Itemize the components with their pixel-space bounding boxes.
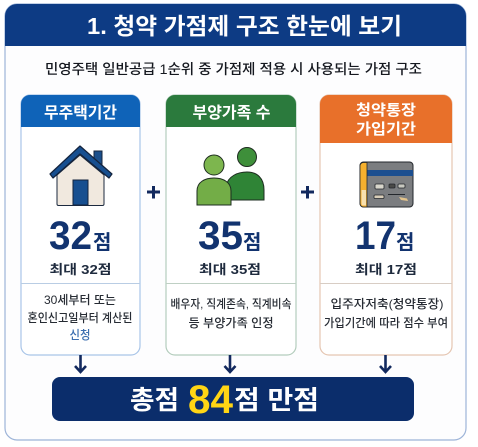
card heading	[356, 102, 416, 138]
arrow 1	[75, 355, 86, 372]
description: 30세부터 또는	[44, 293, 116, 307]
title banner	[5, 4, 466, 46]
total text: 84	[188, 378, 234, 422]
card heading: 무주택기간	[44, 104, 117, 122]
description	[324, 297, 448, 330]
panel: 청약통장 가입기간	[320, 95, 452, 355]
icon: people	[197, 148, 264, 205]
title: 1. 청약 가점제 구조 한눈에 보기	[87, 13, 402, 39]
icon: bankbook	[360, 162, 413, 207]
panel: 무주택기간	[21, 95, 140, 355]
max score: 최대 35점	[199, 262, 261, 277]
score: 32	[49, 214, 92, 258]
plus sign 1	[147, 186, 160, 198]
description: 가입기간에 따라 점수 부여	[324, 316, 448, 330]
description: 혼인신고일부터 계산된	[28, 311, 132, 325]
description: 신청	[70, 328, 90, 342]
description	[170, 297, 292, 330]
plus sign 2	[301, 186, 314, 198]
description: 입주자저축(청약통장)	[330, 297, 444, 311]
subtitle: 민영주택 일반공급 1순위 중 가점제 적용 시 사용되는 가점 구조	[45, 61, 422, 77]
arrow 2	[224, 355, 236, 372]
score: 점	[243, 231, 261, 254]
score: 점	[93, 231, 111, 254]
card heading: 부양가족 수	[192, 104, 271, 122]
max score: 최대 17점	[355, 262, 417, 277]
arrow 3	[380, 355, 391, 372]
description: 배우자, 직계존속, 직계비속	[170, 297, 292, 311]
total text: 점 만점	[234, 385, 319, 415]
total score bar	[52, 377, 414, 422]
total text	[130, 378, 319, 422]
card heading: 가입기간	[356, 121, 416, 138]
score: 점	[396, 231, 414, 254]
max score: 최대 32점	[50, 262, 112, 277]
card heading: 청약통장	[356, 102, 416, 119]
total text: 총점	[130, 385, 179, 415]
score: 17	[355, 214, 396, 258]
description: 등 부양가족 인정	[188, 316, 274, 330]
description	[28, 293, 132, 342]
score: 35	[198, 214, 243, 258]
panel: 부양가족 수	[166, 95, 296, 355]
icon: house	[50, 146, 112, 206]
